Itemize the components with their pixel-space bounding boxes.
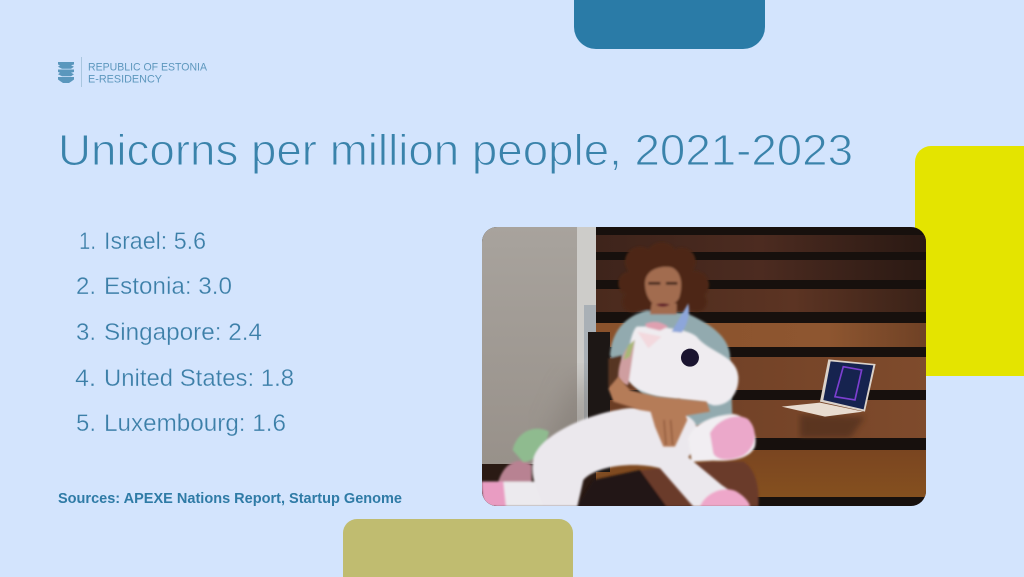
title: Unicorns per million people, 2021-2023 <box>58 126 853 175</box>
front hoof <box>688 414 756 462</box>
plush unicorn <box>482 303 756 507</box>
sweater <box>610 311 732 426</box>
ranked list <box>75 228 294 437</box>
hands and arms <box>608 377 710 447</box>
list item 3: 3. <box>76 319 96 346</box>
body <box>532 407 750 507</box>
hair <box>618 242 709 312</box>
back hoof <box>700 489 750 507</box>
list item 5: Luxembourg: 1.6 <box>104 410 286 437</box>
decorative block: top blue <box>574 0 765 49</box>
laptop <box>782 359 876 417</box>
wall and wooden steps <box>482 227 926 506</box>
list item 2: 2. <box>76 273 96 300</box>
list item 5: 5. <box>76 410 96 437</box>
list item 4: 4. <box>75 365 96 392</box>
face <box>645 267 681 307</box>
list item 1: Israel: 5.6 <box>104 228 206 255</box>
photo: woman holding plush unicorn <box>482 227 926 507</box>
horn <box>672 303 689 333</box>
tail <box>498 461 532 483</box>
unicorn eye <box>681 349 699 367</box>
trousers <box>628 462 760 506</box>
list item 1: 1. <box>79 228 96 255</box>
logo: Republic of Estonia e-Residency: REPUBLIC OF ESTONIA <box>88 61 208 73</box>
logo: Republic of Estonia e-Residency <box>58 57 208 87</box>
decorative block: bottom olive <box>343 519 573 577</box>
list item 2: Estonia: 3.0 <box>104 273 232 300</box>
icon: three lions shield <box>58 62 74 83</box>
list item 4: United States: 1.8 <box>104 365 294 392</box>
logo: Republic of Estonia e-Residency: E-RESIDENCY <box>88 74 163 86</box>
head <box>628 327 738 405</box>
decorative block: right yellow <box>915 146 1024 376</box>
woman <box>577 242 759 507</box>
sources note: Sources: APEXE Nations Report, Startup Genome <box>58 491 402 507</box>
list item 3: Singapore: 2.4 <box>104 319 262 346</box>
